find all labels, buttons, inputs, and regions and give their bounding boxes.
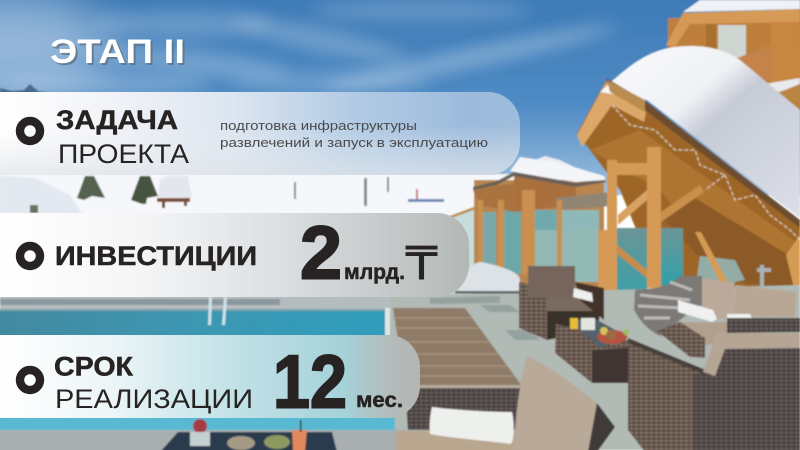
distant mountain (0, 84, 60, 94)
ski lift poles (294, 177, 389, 206)
pool (0, 309, 387, 339)
period value: мес. (356, 389, 403, 412)
currency sign: tenge: ₸ (405, 236, 438, 290)
far armchair (519, 266, 604, 340)
panel: investment (0, 210, 469, 297)
terrace stone (385, 285, 800, 450)
snow bank (458, 262, 520, 292)
far sofa (657, 265, 800, 358)
foreground wicker sofa (405, 388, 524, 430)
title: ЭТАП II (50, 33, 185, 71)
pine trees and hut (77, 176, 105, 200)
wicker coffee table with fruit (555, 317, 629, 383)
heading: task of the project: ПРОЕКТА (58, 139, 189, 169)
large roof underside (577, 79, 800, 300)
sky (0, 0, 800, 195)
task description (220, 118, 488, 150)
big wicker armchair (628, 333, 800, 450)
title: ЭТАП II (52, 35, 187, 73)
investment amount: млрд. (344, 261, 405, 284)
icon: ring bullet (20, 370, 40, 390)
glass and teal pool reflection under roof (535, 230, 598, 282)
heading: implementation period: СРОК (54, 352, 134, 382)
lower chalet (447, 157, 610, 300)
panel: project task (0, 92, 520, 175)
fur blanket (634, 276, 702, 336)
big snow-covered roof (600, 46, 800, 218)
panel: implementation period (0, 335, 420, 424)
white towel (430, 407, 514, 444)
task description: подготовка инфраструктуры (220, 118, 417, 133)
stone foreground (0, 430, 405, 450)
investment amount (300, 210, 405, 294)
upper chalet (666, 0, 800, 122)
posts and beams (478, 147, 800, 302)
icon: ring bullet (20, 246, 40, 266)
heading: investment: ИНВЕСТИЦИИ (55, 241, 257, 271)
wooden deck (393, 308, 522, 386)
table foreground (160, 432, 337, 450)
icon: ring bullet (20, 121, 40, 141)
heading: implementation period: РЕАЛИЗАЦИИ (55, 384, 253, 414)
snow field (0, 174, 515, 216)
beige cushion (513, 357, 597, 450)
heading: task of the project (56, 105, 189, 169)
heading: task of the project: ЗАДАЧА (56, 105, 178, 135)
fountains (208, 297, 227, 325)
heading: implementation period (54, 352, 253, 414)
roof beam (606, 78, 800, 228)
period value: 12 (273, 340, 347, 424)
period value (273, 340, 403, 424)
task description: развлечений и запуск в эксплуатацию (220, 135, 488, 150)
icicle lights (612, 105, 800, 240)
investment amount: 2 (300, 210, 342, 294)
